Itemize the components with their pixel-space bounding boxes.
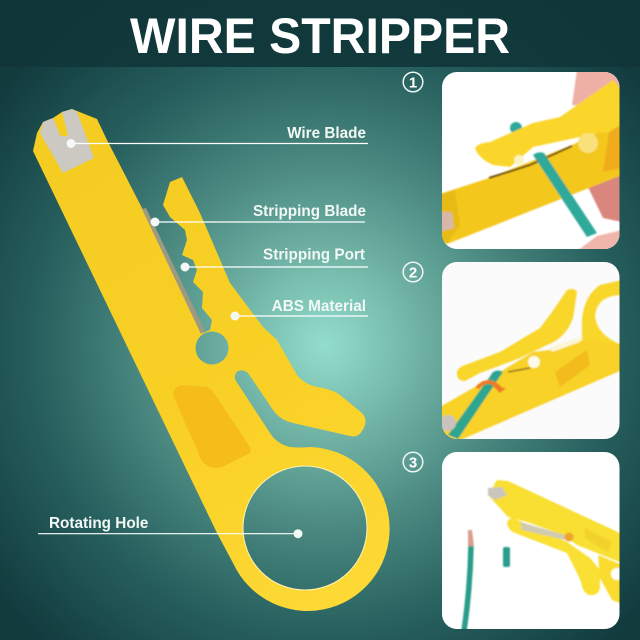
wire blade xyxy=(40,109,94,173)
label: rotating hole: Rotating Hole xyxy=(49,515,148,532)
round hole xyxy=(196,332,228,364)
pocket outline xyxy=(585,529,612,551)
insulation sleeve xyxy=(503,547,510,567)
white port xyxy=(528,356,540,368)
blade slot xyxy=(489,146,572,178)
tool body xyxy=(33,109,390,611)
label: abs material: ABS Material xyxy=(272,298,366,315)
wire xyxy=(533,152,597,237)
jaw xyxy=(507,518,600,595)
fingers xyxy=(571,72,620,106)
orange spot xyxy=(564,532,574,542)
rotation arrow xyxy=(477,382,500,388)
wire stripper tool xyxy=(33,109,390,611)
stripping blade xyxy=(142,208,205,334)
handle xyxy=(598,555,622,604)
label: wire blade: Wire Blade xyxy=(287,125,366,142)
tool head and body xyxy=(488,480,622,563)
pocket xyxy=(555,350,590,387)
ring hole xyxy=(611,568,623,580)
small white port xyxy=(514,155,524,165)
step 2 number: 2 xyxy=(409,264,417,282)
recessed pocket xyxy=(173,385,251,468)
panel: step 2 photo xyxy=(440,262,622,441)
label: stripping port xyxy=(180,246,368,272)
pocket xyxy=(603,125,620,172)
step 1 number xyxy=(403,72,423,92)
panel: step 3 photo xyxy=(442,452,623,631)
slot hole xyxy=(578,133,598,153)
rotating hole xyxy=(243,466,367,590)
grey end xyxy=(440,415,456,431)
lower body xyxy=(442,131,620,245)
header band xyxy=(0,0,640,67)
grey end xyxy=(440,212,454,232)
label: stripping blade: Stripping Blade xyxy=(253,203,366,220)
wire tip xyxy=(510,122,522,134)
label: stripping blade xyxy=(150,203,366,226)
blade strip xyxy=(520,522,570,541)
label: stripping port: Stripping Port xyxy=(263,246,365,264)
ring xyxy=(580,280,620,346)
label: abs material xyxy=(230,298,368,320)
step 3 number: 3 xyxy=(409,454,417,472)
label: rotating hole xyxy=(38,515,302,538)
upper jaw xyxy=(475,80,622,167)
step 3 number xyxy=(403,452,423,472)
blade slot xyxy=(508,368,530,372)
step 1 number: 1 xyxy=(409,74,417,92)
bare copper xyxy=(468,530,474,546)
white wedge xyxy=(550,336,583,352)
step 2 number xyxy=(403,262,423,282)
title: WIRE STRIPPER xyxy=(130,8,510,64)
body xyxy=(440,340,622,441)
wire xyxy=(448,370,503,439)
stripped wire xyxy=(464,546,471,631)
jaw xyxy=(457,289,577,381)
wire blade xyxy=(488,487,507,500)
panel: step 1 photo xyxy=(440,70,622,251)
label: wire blade xyxy=(66,125,368,148)
